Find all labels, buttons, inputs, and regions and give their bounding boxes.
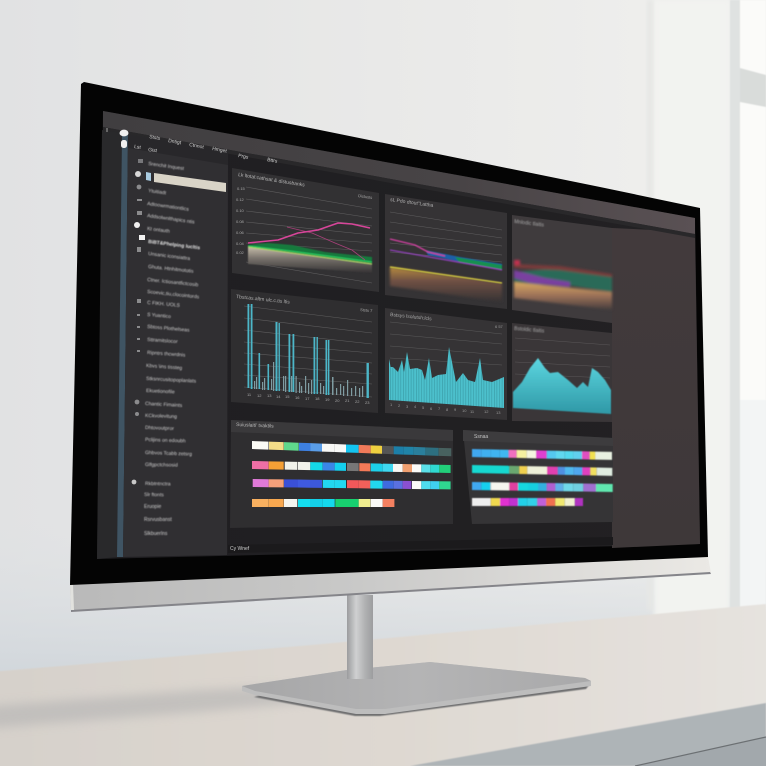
axis labels: bar chart: 14 <box>276 394 281 399</box>
gridlines and axis labels: line chart 1: 0.12 <box>236 197 245 202</box>
sidebar icons <box>106 128 145 484</box>
axis labels: bar area chart: 9 <box>454 407 457 412</box>
top menu labels: Prgs <box>238 153 249 161</box>
strip row 4 <box>252 499 394 507</box>
top menu labels: Ctnnot <box>189 142 205 151</box>
monitor stand <box>242 595 591 716</box>
monitor chin <box>70 557 711 612</box>
sidebar labels: Slkbuerlns <box>144 531 168 537</box>
right strip row 1 <box>472 449 612 460</box>
window light at right edge <box>730 0 766 610</box>
strip row 3 <box>253 479 451 489</box>
status bar: Cy Wnef <box>230 546 250 552</box>
sidebar labels: Adtoowrmationtlics <box>147 201 190 213</box>
sidebar labels: Stksnrcusitopoplanlats <box>146 376 197 385</box>
sidebar labels: Ctner. Ictiosantfictcosib <box>147 277 199 288</box>
sidebar <box>97 128 278 559</box>
sidebar labels: Eruopie <box>144 504 161 510</box>
axis labels: bar area chart: 7 <box>438 406 441 411</box>
sidebar labels: Rsrvusbanst <box>144 517 172 523</box>
panel: line chart 1 <box>232 168 379 292</box>
axis labels: bar chart: 19 <box>325 397 330 402</box>
axis labels: bar area chart: 12 <box>484 409 489 414</box>
axis labels: bar area chart: 10 <box>462 408 467 413</box>
desk <box>0 604 766 766</box>
screen <box>97 111 700 559</box>
sidebar labels: Dhtovoutpror <box>145 425 174 432</box>
monitor <box>70 82 711 612</box>
short bars <box>254 362 363 397</box>
coloured bands: line chart 2 <box>390 239 502 302</box>
stand base <box>242 662 591 716</box>
axis labels: bar area chart: 13 <box>496 410 501 415</box>
gridlines and axis labels: line chart 1: 0.15 <box>237 186 246 191</box>
panel: bar area chart <box>385 308 507 420</box>
top menu labels: Lst <box>134 144 142 151</box>
axis labels: bar area chart: 11 <box>470 409 475 414</box>
blurred strip rows <box>472 449 613 506</box>
axis labels: bar area chart <box>390 324 504 415</box>
sidebar labels: Addsolwnlthapics ntis <box>147 213 195 226</box>
axis labels: bar area chart: 2 <box>398 403 401 408</box>
sidebar labels <box>144 161 201 537</box>
gridlines and axis labels: line chart 1: 0.10 <box>236 208 245 213</box>
sidebar labels: Glfgpctchsosid <box>145 462 178 469</box>
axis labels: bar area chart: 5 <box>422 405 425 410</box>
top menu labels: Gist <box>148 147 158 154</box>
strip row 1 <box>252 441 451 456</box>
sidebar labels: Srenchit Inquest <box>148 161 185 172</box>
axis labels: bar chart: Ststs 7 <box>360 307 373 313</box>
axis labels: bar chart: 12 <box>257 393 262 398</box>
top menu labels: Dntigt <box>168 138 182 146</box>
gridlines and axis labels: line chart 1 <box>236 186 373 283</box>
sidebar labels: Rkbtntnctra <box>145 481 171 487</box>
sidebar labels: Ripntrs thcwrdnis <box>147 350 186 359</box>
top menu labels <box>134 134 278 165</box>
right strip row 3 <box>472 482 613 492</box>
sidebar labels: S Yuantico <box>147 312 171 320</box>
axis labels: bar chart: 23 <box>365 400 370 405</box>
sidebar labels: Pclijins on edoubh <box>145 437 186 444</box>
gridlines and axis labels: line chart 1: 0.02 <box>236 250 245 255</box>
gridlines: bar chart <box>244 306 372 397</box>
sidebar labels: Kbvs \ins tissteg <box>146 363 183 372</box>
axis labels: bar area chart: 6 <box>430 406 433 411</box>
axis labels: bar chart: 17 <box>305 396 310 401</box>
axis labels: bar area chart: 4 <box>414 404 417 409</box>
panel: line chart 3 <box>512 215 612 323</box>
axis labels: bar area chart: 3 <box>406 404 409 409</box>
heading: heat strips right: Ssnaa <box>474 434 488 440</box>
teal area <box>513 358 611 414</box>
tall bars <box>248 304 369 398</box>
axis labels: bar area chart: 1 <box>390 402 393 407</box>
axis labels: bar chart: 16 <box>295 395 300 400</box>
teal bars <box>389 347 504 408</box>
monitor bezel <box>70 82 708 585</box>
panel: colour heat strips left <box>230 420 453 528</box>
gridlines: line chart 2 <box>390 212 502 262</box>
sidebar labels: Unsanic iconsiattra <box>148 251 191 262</box>
sidebar labels: Sbtoss Plothelseas <box>147 324 190 334</box>
panel: colour heat strips right <box>463 430 613 524</box>
stand neck <box>347 595 373 679</box>
sidebar labels: Ytuitiadt <box>148 188 167 197</box>
sidebar labels: BiBT&Phelping lucltis <box>148 239 201 251</box>
sidebar labels: Slr ftonts <box>144 492 164 498</box>
gridlines and axis labels: line chart 1: 0.08 <box>236 219 245 224</box>
axis labels: bar chart: 18 <box>315 396 320 401</box>
panel: bar chart <box>231 289 378 413</box>
heading: bar chart: Tbstcas.altm ulc.c.tis ltis <box>236 294 291 306</box>
right strip row 2 <box>472 465 612 476</box>
heading: heat strips left: Suiuslaiti' tvaktils <box>236 422 274 430</box>
heading: line chart 3: Mnlodic tlaitis <box>514 219 545 229</box>
gridlines: bar area chart <box>390 322 502 365</box>
sidebar labels: Scoevic,tiu,clocointords <box>147 289 200 301</box>
sidebar labels: Ghuta. Htnhitmototis <box>148 264 194 275</box>
axis labels: bar chart: 22 <box>355 399 360 404</box>
sidebar labels: KCkvolevitung <box>145 413 177 420</box>
gridlines: area chart <box>515 338 610 378</box>
top menu labels: Hmget <box>212 146 228 155</box>
axis labels: bar chart: 11 <box>247 392 252 397</box>
gridlines and axis labels: line chart 1: Distusts <box>358 193 373 200</box>
heading: area chart: Bstoldic tlaitis <box>514 326 545 335</box>
top menu labels: Ststs <box>149 134 161 142</box>
panel: area chart <box>512 323 612 422</box>
axis labels: bar chart: 21 <box>345 398 350 403</box>
axis labels: bar chart: 15 <box>285 394 290 399</box>
sidebar labels: Sttramitslocor <box>147 337 178 345</box>
sidebar labels: C FIKH. UOLS <box>147 300 181 309</box>
panel: line chart 2 <box>385 194 507 309</box>
axis labels: bar chart <box>247 307 373 405</box>
sidebar labels: Kt ontauth <box>147 226 170 235</box>
axis labels: bar area chart: 6 57 <box>495 324 504 329</box>
gridlines and axis labels: line chart 1: 0.06 <box>236 230 245 235</box>
axis labels: bar area chart: 8 <box>446 407 449 412</box>
heading: bar area chart: Bstsys lsolutsh:lcls <box>390 312 432 322</box>
heading: line chart 1: Lk ltotal:cathsat & distusbanks <box>238 172 306 189</box>
pink series lines <box>248 223 370 260</box>
active sidebar highlight <box>146 172 226 192</box>
gridlines and axis labels: line chart 1: 0.04 <box>236 241 245 246</box>
sidebar labels: Ghbvos Tcabb zetsrg <box>145 450 192 458</box>
status bar <box>228 537 613 553</box>
sidebar labels: Ekuetionofile <box>146 388 175 396</box>
green band and gradient fill <box>248 243 372 273</box>
sidebar labels: Chantic Fimaints <box>145 401 183 409</box>
top menu labels: Bttrs <box>267 157 278 165</box>
heading: line chart 2: sL Pdo dtout"Lattha <box>390 197 434 209</box>
axis labels: bar chart: 13 <box>267 393 272 398</box>
axis labels: bar chart: 20 <box>335 398 340 403</box>
right strip row 4 <box>472 498 583 506</box>
coloured bands: line chart 3 <box>514 260 612 310</box>
strip row 2 <box>252 461 451 473</box>
